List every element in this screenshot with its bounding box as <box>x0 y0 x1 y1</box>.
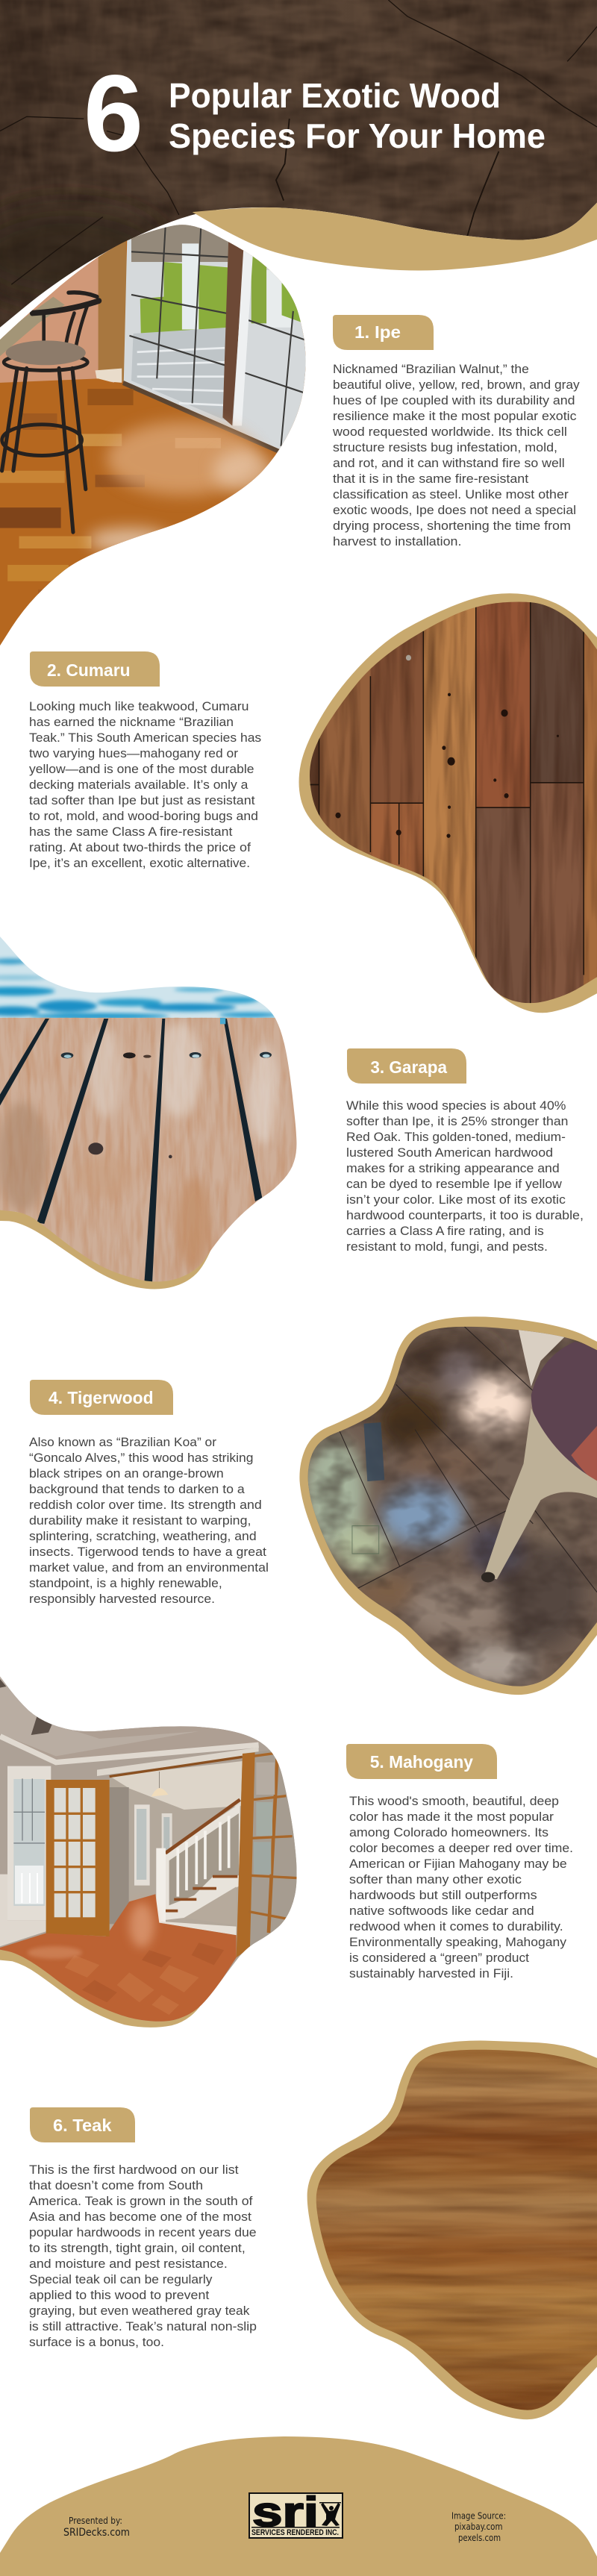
body text: Tigerwood: black stripes on an orange-brown <box>29 1467 224 1481</box>
left French door <box>46 1780 110 1936</box>
logo: SRI Services Rendered Inc.: SERVICES RENDERED INC. <box>251 2528 339 2537</box>
body text: Mahogany <box>349 1795 573 1981</box>
body text: Tigerwood: splintering, scratching, weathering, and <box>29 1530 257 1543</box>
counter <box>0 297 65 356</box>
body text: Garapa: lustered South American hardwood <box>346 1146 553 1160</box>
image source: pixabay.com <box>454 2521 503 2532</box>
room image <box>0 1657 304 2030</box>
body text: Garapa: While this wood species is about 40% <box>346 1099 566 1113</box>
body text: Cumaru: rating. At about two-thirds the price of <box>29 841 251 854</box>
body text: Teak: Asia and has become one of the most <box>29 2210 251 2224</box>
body text: Teak: to its strength, tight grain, oil content, <box>29 2242 246 2255</box>
image source <box>451 2510 506 2543</box>
header: dark wood background <box>0 0 597 336</box>
body text: Mahogany: redwood when it comes to durability. <box>349 1920 563 1933</box>
body text: Ipe: Nicknamed “Brazilian Walnut,” the <box>333 363 529 376</box>
crown molding <box>0 1736 259 1763</box>
body text: Teak: and moisture and pest resistance. <box>29 2257 228 2271</box>
body text: Cumaru: Ipe, it’s an excellent, exotic alternative. <box>29 857 250 870</box>
water <box>0 937 276 1019</box>
panel: 1. Ipe <box>332 315 580 548</box>
body text: Cumaru: has earned the nickname “Brazilian <box>29 716 234 729</box>
pendant lamp <box>151 1772 168 1797</box>
body text: Ipe: structure resists bug infestation, mold, <box>333 441 557 454</box>
wainscot <box>0 1875 46 1946</box>
body text: Ipe: beautiful olive, yellow, red, brown, and gray <box>333 378 580 392</box>
photo 3: weathered dock over blue water <box>0 933 298 1289</box>
body text: Garapa: isn’t your color. Like most of its exotic <box>346 1193 566 1207</box>
holes <box>61 1052 272 1158</box>
footer panel <box>0 2436 597 2576</box>
panel: 5. Mahogany <box>346 1744 573 1981</box>
photo 1: room with stool and wood floor <box>0 225 306 645</box>
heading: 5. Mahogany <box>346 1744 497 1779</box>
column <box>99 241 127 382</box>
body text: Mahogany: softer than many other exotic <box>349 1873 522 1886</box>
tan edge <box>0 1209 211 1289</box>
footer tan shape <box>0 2436 597 2576</box>
heading: 4. Tigerwood: 4. Tigerwood <box>49 1388 154 1407</box>
teak image <box>312 2046 597 2419</box>
body text: Teak: Special teak oil can be regularly <box>29 2273 213 2286</box>
body text: Tigerwood: insects. Tigerwood tends to have a great <box>29 1545 266 1559</box>
body text: Cumaru: two varying hues—mahogany red or <box>29 747 239 760</box>
body text: Cumaru <box>29 700 261 870</box>
body text: Garapa <box>346 1099 584 1254</box>
tan edge <box>0 1948 207 2028</box>
photo 5: interior with French doors and staircase <box>0 1657 304 2030</box>
fan blade <box>31 1715 52 1735</box>
body text: Ipe: classification as steel. Unlike most other <box>333 488 569 501</box>
body text: Tigerwood: responsibly harvested resource. <box>29 1592 215 1606</box>
heading: 4. Tigerwood <box>30 1380 173 1415</box>
body text: Cumaru: has the same Class A fire-resistant <box>29 825 233 839</box>
body text: Ipe: and rot, and it can withstand fire so well <box>333 457 565 470</box>
wall <box>0 248 115 383</box>
title numeral: 6 <box>84 52 143 174</box>
body text: Mahogany: among Colorado homeowners. Its <box>349 1826 548 1839</box>
heading: 6. Teak <box>30 2107 135 2142</box>
image source: Image Source: <box>451 2510 506 2521</box>
body text: Cumaru: to rot, mold, and wood-boring bugs and <box>29 810 258 823</box>
body text: Tigerwood: background that tends to darken to a <box>29 1483 246 1496</box>
ceiling <box>0 1676 261 1743</box>
body text: Mahogany: hardwoods but still outperforms <box>349 1889 537 1902</box>
body text: Tigerwood: durability make it resistant to warping, <box>29 1514 251 1528</box>
heading: 2. Cumaru: 2. Cumaru <box>47 660 130 680</box>
gaps <box>0 1019 262 1284</box>
body text: Mahogany: color becomes a deeper red over time. <box>349 1842 573 1855</box>
body text: Teak: is still attractive. Teak’s natural non-slip <box>29 2320 257 2333</box>
left window <box>7 1766 51 1920</box>
presented by <box>63 2515 130 2539</box>
photo 2: reclaimed wood planks blob <box>299 593 597 1013</box>
panel: 6. Teak <box>29 2107 257 2349</box>
tan outline <box>307 2041 597 2419</box>
heading: 1. Ipe: 1. Ipe <box>354 322 401 342</box>
body text: Mahogany: Environmentally speaking, Mahogany <box>349 1936 567 1949</box>
heading: 1. Ipe <box>333 315 434 350</box>
body text: Mahogany: This wood's smooth, beautiful, deep <box>349 1795 559 1808</box>
body text: Garapa: hardwood counterparts, it too is durable, <box>346 1209 584 1222</box>
title line two: Species For Your Home <box>169 116 546 155</box>
body text: Cumaru: decking materials available. It’s only a <box>29 778 249 792</box>
body text: Tigerwood: standpoint, is a highly renewable, <box>29 1577 222 1590</box>
body text: Tigerwood: market value, and from an environmental <box>29 1561 269 1575</box>
body text: Mahogany: color has made it the most popular <box>349 1810 554 1824</box>
body text: Teak <box>29 2163 257 2349</box>
body text: Cumaru: tad softer than Ipe but just as resistant <box>29 794 255 807</box>
body text: Teak: This is the first hardwood on our list <box>29 2163 239 2177</box>
body text: Teak: applied to this wood to prevent <box>29 2289 210 2302</box>
floor <box>0 1894 237 2030</box>
body text: Garapa: can be dyed to resemble Ipe if yellow <box>346 1178 562 1191</box>
body text: Mahogany: native softwoods like cedar and <box>349 1904 534 1918</box>
body text: Mahogany: is considered a “green” product <box>349 1951 529 1965</box>
body text: Cumaru: Teak.” This South American species has <box>29 731 261 745</box>
body text: Mahogany: sustainably harvested in Fiji. <box>349 1967 513 1981</box>
body text: Ipe: hues of Ipe coupled with its durability and <box>333 394 575 407</box>
body text: Mahogany: American or Fijian Mahogany may be <box>349 1857 567 1871</box>
panel: 3. Garapa <box>346 1048 584 1254</box>
presented by: Presented by: <box>69 2515 122 2526</box>
logo: SRI Services Rendered Inc.: sri <box>252 2488 319 2535</box>
lintel <box>97 1748 259 1776</box>
panel: 4. Tigerwood <box>29 1380 269 1606</box>
heading: 2. Cumaru <box>30 651 160 687</box>
door interior and windows <box>110 1787 129 1924</box>
title line one: Popular Exotic Wood <box>169 76 501 115</box>
body text: Ipe: exotic woods, Ipe does not need a special <box>333 504 576 517</box>
logo: SRI Services Rendered Inc. <box>249 2488 343 2538</box>
tan outline <box>299 1316 597 1695</box>
chair seat and leg <box>518 1330 564 1387</box>
floor <box>0 378 282 655</box>
title <box>84 52 546 174</box>
back room <box>110 1776 243 1938</box>
decorative tan wave under header <box>193 203 597 271</box>
body text: Cumaru: yellow—and is one of the most durable <box>29 763 254 776</box>
photo 4: multicolor distressed floor with chair leg <box>299 1316 597 1695</box>
body text: Teak: America. Teak is grown in the south of <box>29 2195 253 2208</box>
body text: Garapa: softer than Ipe, it is 25% stronger than <box>346 1115 568 1128</box>
panel: 2. Cumaru <box>29 651 261 870</box>
body text: Tigerwood: Also known as “Brazilian Koa” or <box>29 1436 217 1449</box>
heading: 3. Garapa <box>347 1048 466 1084</box>
photo 6: teak wood surface blob <box>307 2041 597 2419</box>
body text: Ipe: harvest to installation. <box>333 535 461 548</box>
glass door <box>124 221 312 458</box>
body text: Teak: popular hardwoods in recent years due <box>29 2226 257 2239</box>
stairs <box>166 1804 240 1920</box>
right French door <box>239 1751 297 1946</box>
body text: Garapa: Red Oak. This golden-toned, medium- <box>346 1131 566 1144</box>
body text: Ipe: resilience make it the most popular exotic <box>333 410 576 423</box>
body text: Tigerwood: “Goncalo Alves,” this wood has striking <box>29 1451 254 1465</box>
heading: 6. Teak: 6. Teak <box>53 2116 112 2135</box>
floor image <box>301 1318 597 1695</box>
stool <box>2 293 99 532</box>
body text: Cumaru: Looking much like teakwood, Cumaru <box>29 700 249 713</box>
dock image <box>0 933 298 1287</box>
deck <box>0 1018 298 1287</box>
planks image <box>304 594 597 1012</box>
image source: pexels.com <box>458 2532 501 2543</box>
body text: Teak: graying, but even weathered gray teak <box>29 2304 250 2318</box>
body text: Tigerwood: reddish color over time. Its strength and <box>29 1498 262 1512</box>
body text: Garapa: carries a Class A fire rating, and is <box>346 1225 544 1238</box>
body text: Ipe: wood requested worldwide. Its thick cell <box>332 425 567 439</box>
body text: Teak: that doesn’t come from South <box>29 2179 203 2192</box>
body text: Ipe: that it is in the same fire-resistant <box>333 472 529 486</box>
presented by: SRIDecks.com <box>63 2527 130 2539</box>
body text: Teak: surface is a bonus, too. <box>29 2336 164 2349</box>
heading: 3. Garapa: 3. Garapa <box>370 1057 447 1077</box>
tan outline <box>299 593 597 1013</box>
body text: Ipe <box>332 363 580 548</box>
body text: Garapa: makes for a striking appearance and <box>346 1162 560 1175</box>
body text: Garapa: resistant to mold, fungi, and pests. <box>346 1240 548 1254</box>
body text: Ipe: drying process, shortening the time from <box>333 519 571 533</box>
beam <box>110 1757 243 1777</box>
heading: 5. Mahogany: 5. Mahogany <box>370 1752 473 1772</box>
body text: Tigerwood <box>29 1436 269 1606</box>
